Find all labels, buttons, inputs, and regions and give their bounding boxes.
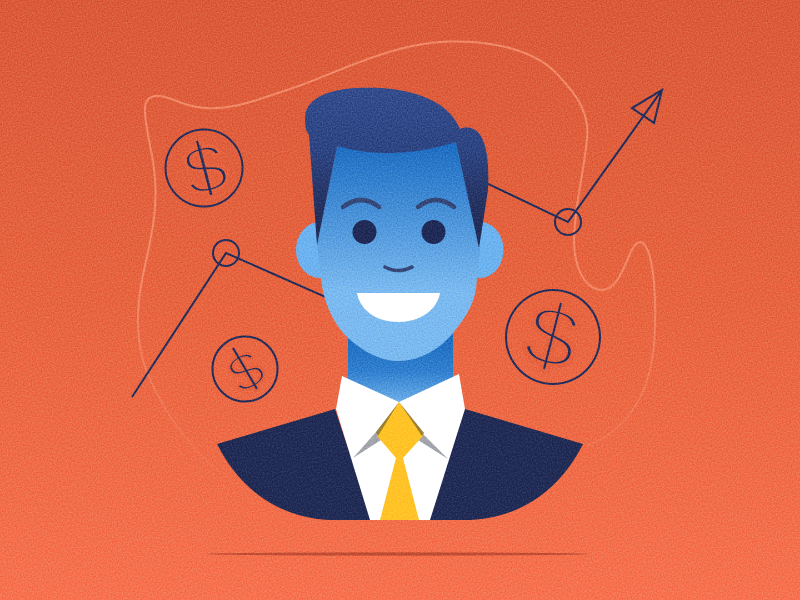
suit jacket [217,409,583,520]
face [317,142,480,361]
growth chart arrow: right segment [480,90,662,235]
dollar coin: bottom left: $ [217,338,275,405]
decorative outline blob [138,42,655,470]
ground shadow [206,552,590,556]
collar shadows [353,432,448,459]
dollar coin: top left: $ [176,128,235,212]
figure: businessman [217,88,583,520]
eyes [352,220,446,244]
ears [296,222,504,278]
eyebrows [343,200,454,207]
growth chart line: left segment [132,240,330,397]
nose smile [385,267,412,270]
dollar coin: right: $ [515,285,589,389]
neck [348,330,453,405]
shirt and collar [336,374,465,520]
mouth [357,293,440,322]
hair [305,88,488,248]
tie [376,402,424,520]
